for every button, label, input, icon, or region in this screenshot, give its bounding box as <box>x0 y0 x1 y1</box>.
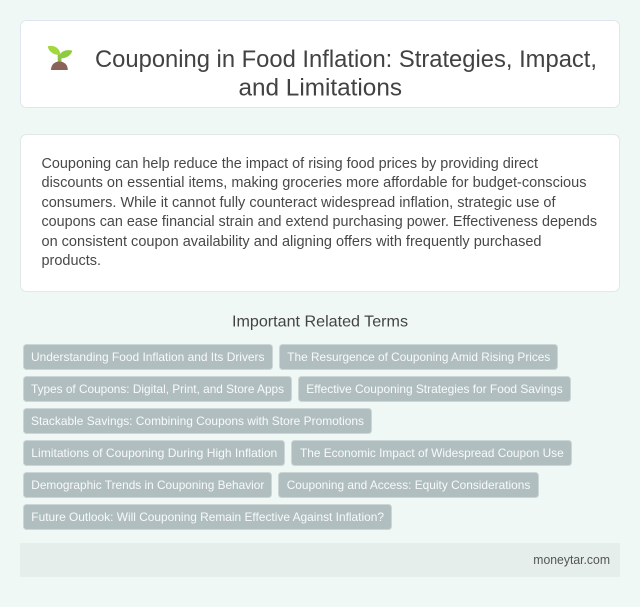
tag <box>24 408 372 434</box>
tag: The Resurgence of Couponing Amid Rising Prices <box>287 350 550 364</box>
icon: seedling <box>48 46 72 70</box>
tag <box>24 344 272 370</box>
tag: The Economic Impact of Widespread Coupon Use <box>300 446 564 460</box>
tag: Stackable Savings: Combining Coupons with Store Promotions <box>31 414 364 428</box>
title text <box>95 46 597 102</box>
tag: Couponing and Access: Equity Considerations <box>287 478 530 492</box>
tag <box>24 472 272 498</box>
tag <box>298 376 570 402</box>
summary text: products. <box>42 253 101 269</box>
summary text: discounts on essential items, making groceries more affordable for budget-conscious <box>42 175 586 191</box>
footer bar <box>20 543 620 577</box>
panel: related term tags <box>24 344 572 530</box>
tag: Demographic Trends in Couponing Behavior <box>31 478 264 492</box>
footer bar: moneytar.com <box>533 552 610 567</box>
panel: title card <box>20 20 620 108</box>
tag: Limitations of Couponing During High Inflation <box>31 446 277 460</box>
summary text <box>42 156 597 269</box>
tag <box>292 440 572 466</box>
tag <box>24 504 392 530</box>
panel: summary card <box>20 134 620 292</box>
summary text: Couponing can help reduce the impact of rising food prices by providing direct <box>42 156 538 172</box>
summary text: on consistent coupon availability and aligning offers with frequently purchased <box>42 234 542 250</box>
summary text: consumers. While it cannot fully counteract widespread inflation, strategic use of <box>42 195 557 211</box>
tag: Effective Couponing Strategies for Food Savings <box>306 382 563 396</box>
heading: important related terms: Important Related Terms <box>232 314 408 330</box>
tag: Types of Coupons: Digital, Print, and Store Apps <box>31 382 284 396</box>
tag: Future Outlook: Will Couponing Remain Effective Against Inflation? <box>31 510 384 524</box>
summary text: coupons can ease financial strain and extend purchasing power. Effectiveness depends <box>42 214 597 230</box>
title text: Couponing in Food Inflation: Strategies, Impact, <box>95 46 597 73</box>
tag <box>278 472 538 498</box>
tag <box>24 376 292 402</box>
tag: Understanding Food Inflation and Its Drivers <box>31 350 264 364</box>
title text: and Limitations <box>238 74 402 102</box>
tag <box>280 344 558 370</box>
tag <box>24 440 284 466</box>
